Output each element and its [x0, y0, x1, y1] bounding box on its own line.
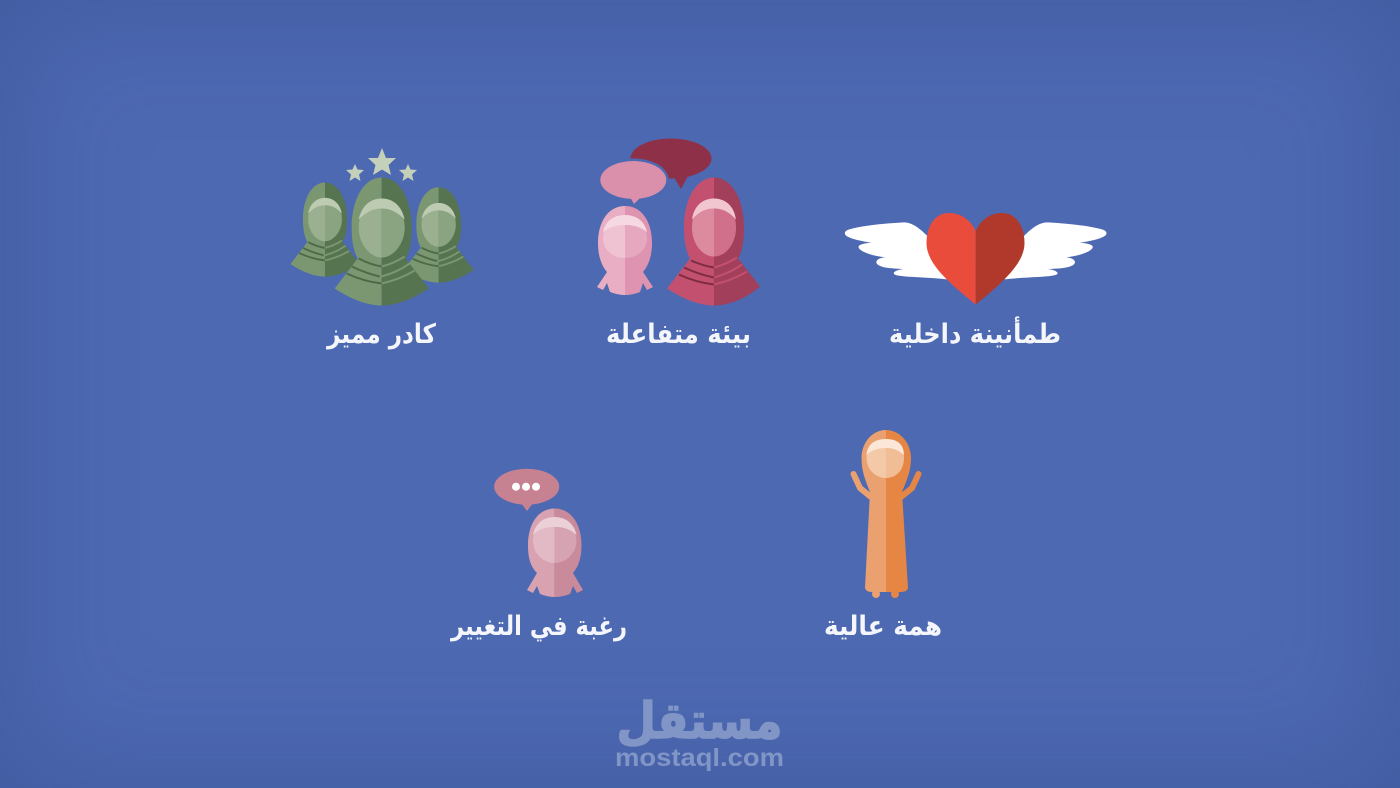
- label: distinguished staff: كادر مميز: [325, 319, 436, 350]
- figure: centre green: [335, 178, 429, 306]
- icon: winged heart: [845, 213, 1106, 304]
- icon: dark speech bubble: [630, 138, 712, 189]
- watermark: latin wordmark: mostaql.com: [615, 744, 784, 772]
- icon: body and hood: [862, 430, 911, 598]
- figure: light pink small: [597, 206, 653, 295]
- figure: left green: [290, 182, 360, 277]
- watermark: arabic wordmark: مستقل: [616, 692, 782, 750]
- label: inner peace: طمأنينة داخلية: [889, 316, 1061, 350]
- icon: light speech bubble: [598, 158, 669, 204]
- figure: right green: [404, 187, 474, 283]
- icon: three stars: [346, 148, 417, 181]
- icon: orange figure with raised arms: [854, 430, 918, 598]
- icon: wings: [845, 222, 1106, 279]
- figure: dark rose: [667, 178, 760, 306]
- icon: figure with thinking bubble: [494, 469, 583, 597]
- label: interactive environment: بيئة متفاعلة: [606, 319, 751, 350]
- icon: team of three green figures with stars: [290, 148, 474, 306]
- icon: heart: [926, 213, 1024, 304]
- figure: dusty pink: [527, 508, 583, 597]
- watermark: mostaql logo: [615, 692, 784, 772]
- label: desire for change: رغبة في التغيير: [449, 611, 627, 642]
- icon: arms: [854, 474, 918, 497]
- label: high ambition: همة عالية: [824, 611, 942, 642]
- icon: speech bubble with dots: [494, 469, 559, 511]
- icon: two figures talking: [597, 138, 760, 306]
